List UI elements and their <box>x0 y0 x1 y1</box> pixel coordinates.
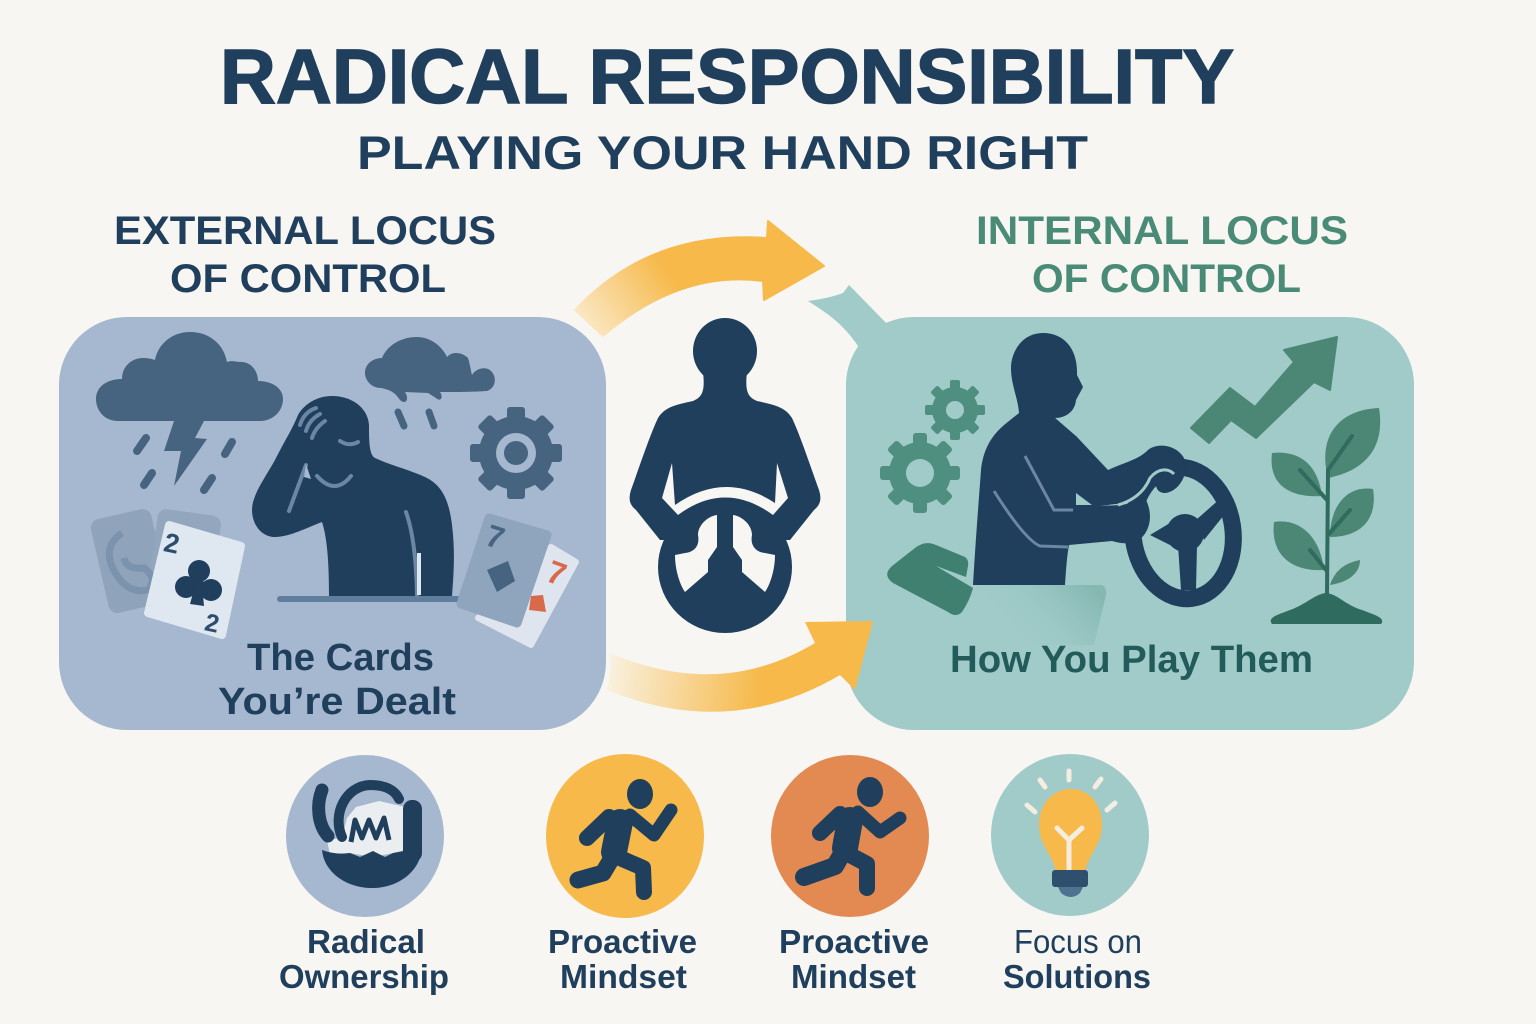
icon: gears <box>880 380 985 513</box>
icon: growth arrow <box>1191 337 1337 443</box>
icon: right hand of cards: 7 <box>482 518 509 556</box>
shadow block under person <box>973 585 1106 645</box>
icon: small rain cloud <box>365 337 495 426</box>
heading: external locus of control <box>114 209 496 301</box>
icon: left hand of cards: 2 <box>202 608 222 639</box>
label: proactive mindset second <box>779 923 929 995</box>
icon circle: proactive mindset, orange <box>771 755 929 917</box>
icon: steering wheel <box>1124 461 1242 605</box>
label: the cards you're dealt: The Cards <box>247 637 434 679</box>
heading: internal locus of control: INTERNAL LOCUS <box>976 209 1348 253</box>
label: proactive mindset <box>548 923 697 995</box>
figure: central person at steering wheel <box>630 318 820 633</box>
panel: external locus <box>59 317 606 730</box>
arrow: bottom curved arrow <box>607 621 873 712</box>
label: how you play them: How You Play Them <box>950 639 1313 681</box>
heading: internal locus of control <box>976 209 1348 301</box>
heading: internal locus of control: OF CONTROL <box>1032 257 1301 301</box>
label: radical ownership: Radical <box>307 923 425 960</box>
label: the cards you're dealt: You’re Dealt <box>218 681 456 723</box>
heading: external locus of control: EXTERNAL LOCUS <box>114 209 496 253</box>
icon circle: radical ownership <box>286 755 444 917</box>
icon: gear <box>470 407 562 499</box>
icon: storm cloud with lightning <box>96 332 283 490</box>
label: the cards you're dealt <box>218 637 456 723</box>
title: RADICAL RESPONSIBILITY <box>220 34 1234 120</box>
subtitle: PLAYING YOUR HAND RIGHT <box>357 126 1088 179</box>
arrow: top curved arrow <box>575 221 824 336</box>
label: radical ownership: Ownership <box>279 958 449 995</box>
label: proactive mindset: Mindset <box>560 958 687 995</box>
label: proactive mindset second: Mindset <box>791 958 916 995</box>
icon: desk line <box>280 596 458 602</box>
icon: right hand of cards <box>461 518 576 645</box>
label: focus on solutions: Focus on <box>1014 923 1142 960</box>
label: proactive mindset second: Proactive <box>779 923 929 960</box>
label: proactive mindset: Proactive <box>548 923 697 960</box>
label: focus on solutions: Solutions <box>1003 958 1151 995</box>
icon: right hand of cards: 7 <box>542 553 571 593</box>
label: focus on solutions <box>1003 923 1151 995</box>
panel: internal locus <box>808 285 1414 730</box>
icon: left hand of cards <box>89 507 241 639</box>
label: radical ownership <box>279 923 449 995</box>
icon: green block <box>887 543 973 615</box>
figure: person steering <box>973 333 1186 585</box>
heading: external locus of control: OF CONTROL <box>170 257 446 301</box>
icon circle: light bulb <box>991 754 1149 916</box>
icon: plant <box>1271 408 1382 624</box>
icon: left hand of cards: 2 <box>161 527 182 560</box>
figure: stressed person <box>252 396 454 596</box>
icon circle: proactive mindset, yellow <box>546 754 704 918</box>
